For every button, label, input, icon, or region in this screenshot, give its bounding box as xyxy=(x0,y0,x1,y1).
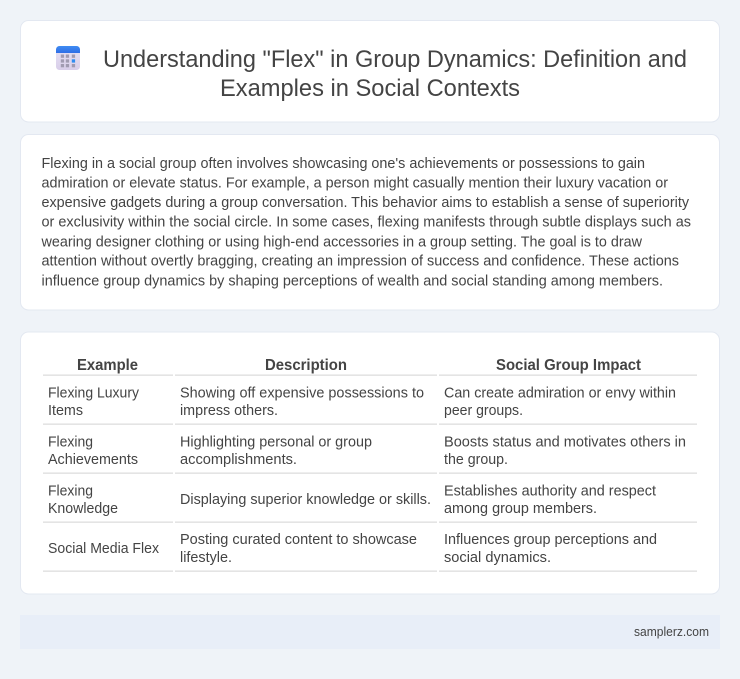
text block: paragraph: admiration or elevate status. For example, a person might casually mention their luxury vacation or xyxy=(42,176,668,192)
table row: luxury items: Showing off expensive possessions to xyxy=(180,386,424,402)
table row: knowledge: Knowledge xyxy=(48,501,118,517)
table row: social media: Posting curated content to showcase xyxy=(180,532,417,548)
table row: social media: social dynamics. xyxy=(444,550,551,566)
icon: calendar xyxy=(56,46,80,70)
table row: luxury items: Flexing Luxury xyxy=(48,386,140,402)
footer: samplerz.com xyxy=(634,624,709,639)
table row: luxury items: Can create admiration or envy within xyxy=(444,386,676,402)
text block: paragraph: expensive gadgets during a group conversation. This behavior aims to establish a sense of superiority xyxy=(42,195,690,211)
text block: paragraph: or exclusivity within the social circle. In some cases, flexing manifests through subtle displays such as xyxy=(42,214,691,230)
table row: achievements: Flexing xyxy=(48,434,93,450)
table row: achievements: accomplishments. xyxy=(180,452,297,468)
text block: paragraph: influence group dynamics by shaping perceptions of wealth and social standing among members. xyxy=(42,274,663,290)
table row: knowledge xyxy=(48,484,656,517)
table row: achievements: Achievements xyxy=(48,452,138,468)
table row: luxury items: impress others. xyxy=(180,403,278,419)
table row: knowledge: Establishes authority and respect xyxy=(444,484,656,500)
table row: achievements: Highlighting personal or group xyxy=(180,434,372,450)
title xyxy=(103,46,687,102)
text block: paragraph: wearing designer clothing or using high-end accessories in a group setting. The goal is to draw xyxy=(41,234,642,250)
panel: intro paragraph xyxy=(20,134,720,310)
table row: knowledge: among group members. xyxy=(444,501,597,517)
title: Examples in Social Contexts xyxy=(220,75,520,102)
footer xyxy=(20,615,720,649)
text block: paragraph xyxy=(41,156,691,290)
table row: achievements: the group. xyxy=(444,452,508,468)
title: Understanding "Flex" in Group Dynamics: Definition and xyxy=(103,46,687,73)
table row: knowledge: Flexing xyxy=(48,484,93,500)
table row: social media xyxy=(48,532,657,566)
panel: title card xyxy=(20,20,720,122)
table row: luxury items xyxy=(48,386,676,419)
table row: social media: Social Media Flex xyxy=(48,541,160,557)
table row: luxury items: peer groups. xyxy=(444,403,523,419)
table header: Example xyxy=(77,357,138,374)
table row: knowledge: Displaying superior knowledge or skills. xyxy=(180,492,431,508)
table header: Social Group Impact xyxy=(496,357,642,374)
table row: social media: lifestyle. xyxy=(180,550,232,566)
table row: achievements xyxy=(48,434,686,468)
table header: Description xyxy=(265,357,347,374)
table row: achievements: Boosts status and motivates others in xyxy=(444,434,686,450)
text block: paragraph: Flexing in a social group often involves showcasing one's achievements or possessions to gain xyxy=(42,156,645,172)
table row: luxury items: Items xyxy=(48,403,83,419)
table header xyxy=(77,357,642,374)
panel: examples table xyxy=(20,332,720,594)
table row: social media: Influences group perceptions and xyxy=(444,532,657,548)
text block: paragraph: attention without overtly bragging, creating an impression of success and confidence. These actions xyxy=(42,254,679,270)
